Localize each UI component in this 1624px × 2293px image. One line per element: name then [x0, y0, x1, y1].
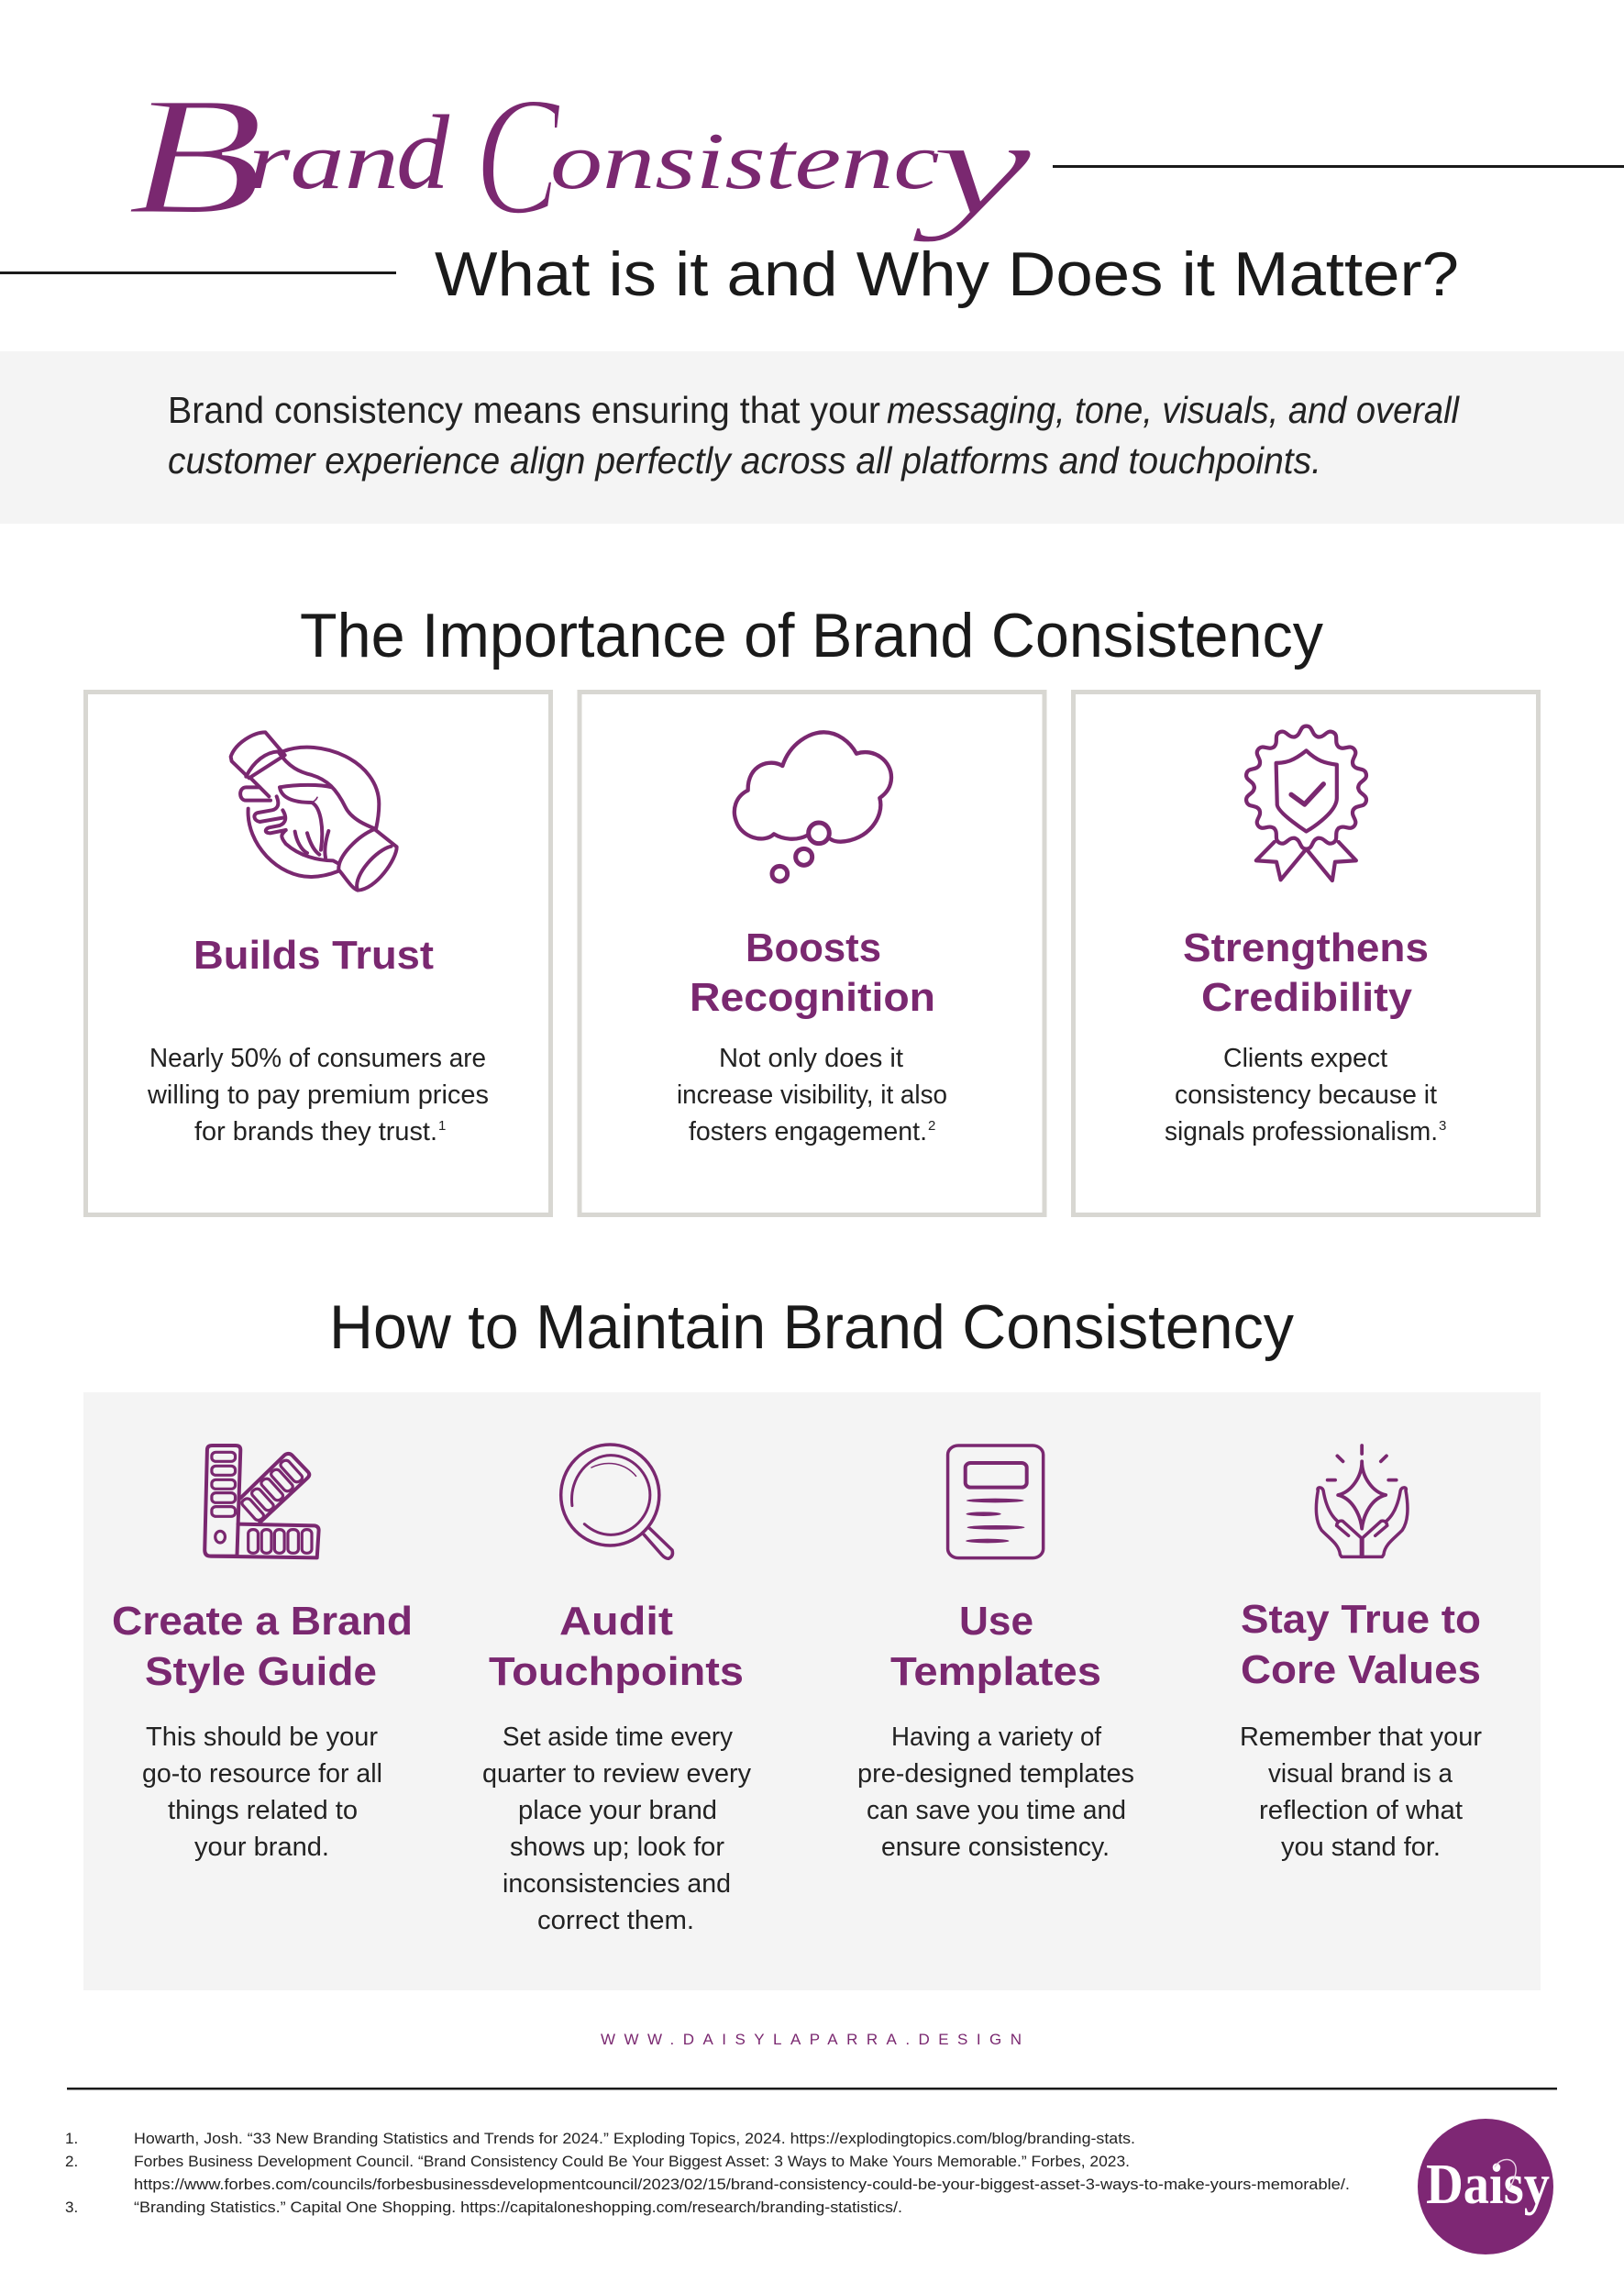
card heading [1183, 925, 1429, 1020]
card heading: Boosts [746, 925, 881, 970]
card body: increase visibility, it also [677, 1080, 947, 1110]
title: Brand Consistency: onsistenc [550, 117, 940, 206]
card body [147, 1044, 489, 1146]
card body [677, 1044, 947, 1146]
column body: your brand. [194, 1833, 329, 1862]
rule: right of title [1053, 165, 1624, 168]
references: 3. [65, 2199, 78, 2216]
column body: This should be your [146, 1723, 378, 1752]
column heading: Create a Brand [112, 1599, 413, 1644]
icon: thought cloud [735, 732, 891, 881]
column body [857, 1723, 1134, 1862]
icon: magnifying glass [561, 1445, 672, 1558]
panel: how to maintain [83, 1392, 1541, 1990]
column: Create a Brand Style Guide [112, 1446, 413, 1862]
card body: Not only does it [719, 1044, 903, 1073]
card body: fosters engagement. [689, 1117, 927, 1146]
panel: Boosts Recognition [580, 692, 1044, 1214]
column heading: Touchpoints [489, 1649, 744, 1694]
logo: Daisy: Daisy [1426, 2154, 1550, 2216]
column body: quarter to review every [482, 1759, 751, 1789]
panel: Strengthens Credibility [1073, 692, 1539, 1214]
column heading: Stay True to [1241, 1597, 1481, 1642]
column body: pre-designed templates [857, 1759, 1134, 1789]
column heading: Templates [890, 1649, 1101, 1694]
column body: shows up; look for [510, 1833, 724, 1862]
column body: Having a variety of [891, 1723, 1102, 1752]
card body: 1 [438, 1118, 446, 1134]
column body [482, 1723, 751, 1935]
column body [1240, 1723, 1482, 1862]
definition text [168, 389, 1461, 482]
title: Brand Consistency: C [475, 62, 561, 250]
card body [1165, 1044, 1446, 1146]
column body [142, 1723, 382, 1862]
references: 2. [65, 2153, 78, 2170]
card heading: Credibility [1201, 975, 1413, 1020]
subtitle: What is it and Why Does it Matter? [435, 239, 1459, 309]
title: Brand Consistency: y [911, 91, 1033, 243]
definition text: messaging, tone, visuals, and overall [887, 389, 1461, 431]
references: “Branding Statistics.” Capital One Shopping. https://capitaloneshopping.com/research/branding-statistics/. [134, 2199, 902, 2216]
icon: handshake [231, 732, 397, 891]
card body: 3 [1439, 1118, 1446, 1134]
definition text: Brand consistency means ensuring that your [168, 389, 880, 431]
column body: ensure consistency. [881, 1833, 1110, 1862]
logo: Daisy [1418, 2119, 1553, 2254]
title: Brand Consistency: B [127, 62, 264, 250]
column: Audit Touchpoints [482, 1445, 751, 1935]
column body: correct them. [537, 1906, 694, 1935]
card body: consistency because it [1175, 1080, 1437, 1110]
heading: The Importance of Brand Consistency: The Importance of Brand Consistency [300, 601, 1323, 670]
icon: colour swatches [204, 1446, 319, 1557]
column body: go-to resource for all [142, 1759, 382, 1789]
card heading: Strengthens [1183, 925, 1429, 970]
footer rule [67, 2088, 1557, 2089]
references: https://www.forbes.com/councils/forbesbusinessdevelopmentcouncil/2023/02/15/brand-consistency-could-be-your-biggest-asset-3-ways-to-make-yours-memorable/. [134, 2176, 1350, 2193]
card heading: Builds Trust [193, 933, 434, 978]
card body: 2 [928, 1118, 935, 1134]
column: Use Templates [857, 1446, 1134, 1862]
card heading: Recognition [690, 975, 935, 1020]
column body: can save you time and [867, 1796, 1126, 1825]
column heading [890, 1599, 1101, 1694]
card body: willing to pay premium prices [147, 1080, 489, 1110]
panel: Builds Trust [86, 692, 550, 1214]
column heading [489, 1599, 744, 1694]
column heading: Audit [559, 1599, 673, 1644]
column: Stay True to Core Values [1240, 1446, 1482, 1862]
website url: WWW.DAISYLAPARRA.DESIGN [601, 2031, 1022, 2048]
definition text: customer experience align perfectly across all platforms and touchpoints. [168, 439, 1321, 482]
icon: template document [948, 1446, 1044, 1558]
column heading: Style Guide [145, 1649, 377, 1694]
references: Forbes Business Development Council. “Brand Consistency Could Be Your Biggest Asset: 3 Ways to Make Yours Memorable.” Forbes, 2023. [134, 2153, 1130, 2170]
column body: reflection of what [1259, 1796, 1463, 1825]
column heading [1241, 1597, 1481, 1692]
panel: definition band [0, 351, 1624, 524]
column body: Remember that your [1240, 1723, 1482, 1752]
column body: place your brand [518, 1796, 717, 1825]
column body: inconsistencies and [503, 1869, 731, 1899]
column heading [112, 1599, 413, 1694]
icon: hands holding sparkle [1316, 1446, 1408, 1556]
column body: Set aside time every [503, 1723, 733, 1752]
title: Brand Consistency: ran [248, 117, 399, 206]
references [65, 2130, 1350, 2216]
title: Brand Consistency: d [396, 94, 450, 211]
card body: Nearly 50% of consumers are [149, 1044, 486, 1073]
column body: things related to [168, 1796, 358, 1825]
column body: visual brand is a [1268, 1759, 1453, 1789]
column heading: Core Values [1241, 1647, 1481, 1692]
rule: left of subtitle [0, 271, 396, 274]
card body: Clients expect [1223, 1044, 1387, 1073]
heading: How to Maintain Brand Consistency: How to Maintain Brand Consistency [329, 1292, 1294, 1362]
column heading: Use [959, 1599, 1033, 1644]
column body: you stand for. [1281, 1833, 1441, 1862]
references: Howarth, Josh. “33 New Branding Statistics and Trends for 2024.” Exploding Topics, 2024. https://explodingtopics.com/blog/branding-stats. [134, 2130, 1135, 2147]
card body: signals professionalism. [1165, 1117, 1438, 1146]
references: 1. [65, 2130, 78, 2147]
icon: award badge with shield [1243, 726, 1369, 881]
card heading [690, 925, 935, 1020]
card body: for brands they trust. [194, 1117, 437, 1146]
